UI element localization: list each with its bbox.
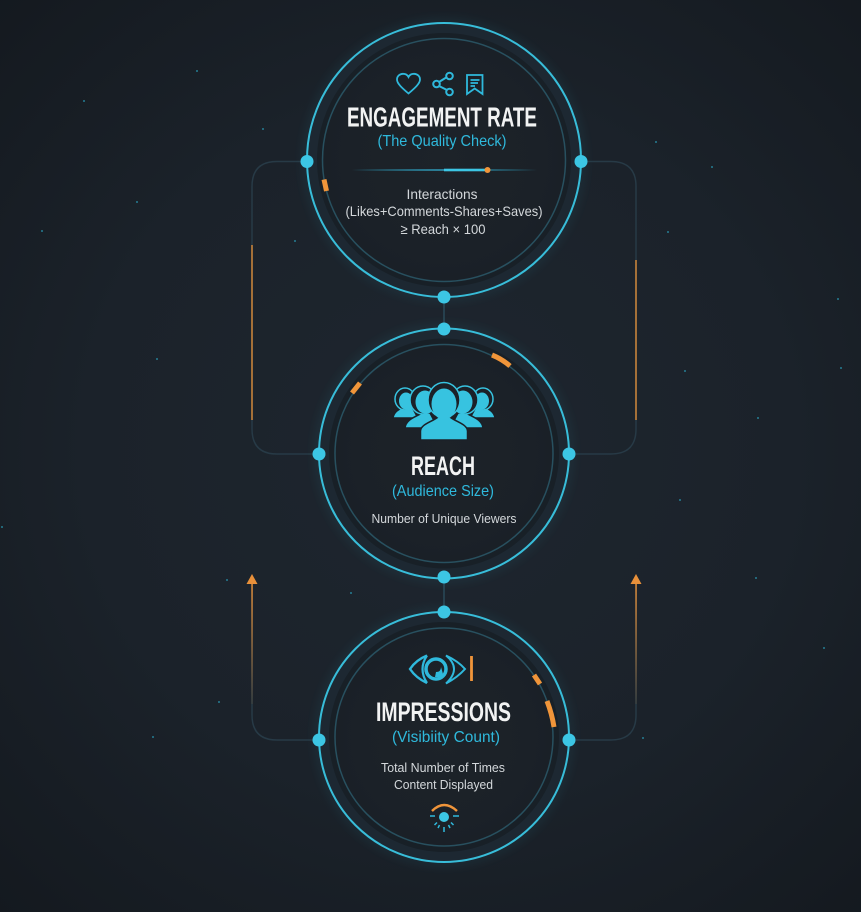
connector: top to middle [443, 297, 445, 329]
description: Number of Unique Viewers [372, 511, 517, 526]
icon: share [433, 73, 453, 95]
divider with marker [352, 167, 537, 173]
icon: heart [397, 74, 420, 94]
icon: eye [410, 656, 472, 684]
icon: bookmark [467, 75, 482, 94]
subtitle: (The Quality Check) [378, 133, 506, 150]
connector: top left loop [252, 162, 319, 454]
description: Total Number of Times [381, 760, 505, 775]
formula: ≥ Reach × 100 [400, 221, 486, 237]
formula: Interactions [406, 186, 478, 202]
ring nodes [312, 606, 576, 746]
orange ring accents [352, 355, 510, 393]
description [381, 760, 505, 792]
panel: reach [312, 322, 576, 584]
icon: audience [393, 382, 495, 440]
subtitle: (Visibiity Count) [392, 729, 500, 746]
ring nodes [300, 155, 588, 304]
ring nodes [312, 322, 576, 584]
panel: engagement rate [300, 22, 588, 304]
arrow: bottom right [569, 574, 642, 740]
scattered particles [1, 70, 842, 739]
icon: signal eye [430, 805, 459, 832]
title: REACH [411, 451, 475, 481]
connector: middle to bottom [443, 577, 445, 612]
arrow: bottom left [246, 574, 319, 740]
orange ring accents [534, 675, 554, 727]
formula: (Likes+Comments-Shares+Saves) [346, 203, 542, 219]
title: IMPRESSIONS [376, 697, 511, 727]
description: Content Displayed [394, 777, 493, 792]
subtitle: (Audience Size) [392, 483, 494, 500]
formula [346, 186, 542, 237]
connector: top right loop [569, 162, 636, 454]
title: ENGAGEMENT RATE [347, 102, 537, 132]
orange ring accent [324, 180, 326, 191]
panel: impressions [312, 606, 576, 863]
